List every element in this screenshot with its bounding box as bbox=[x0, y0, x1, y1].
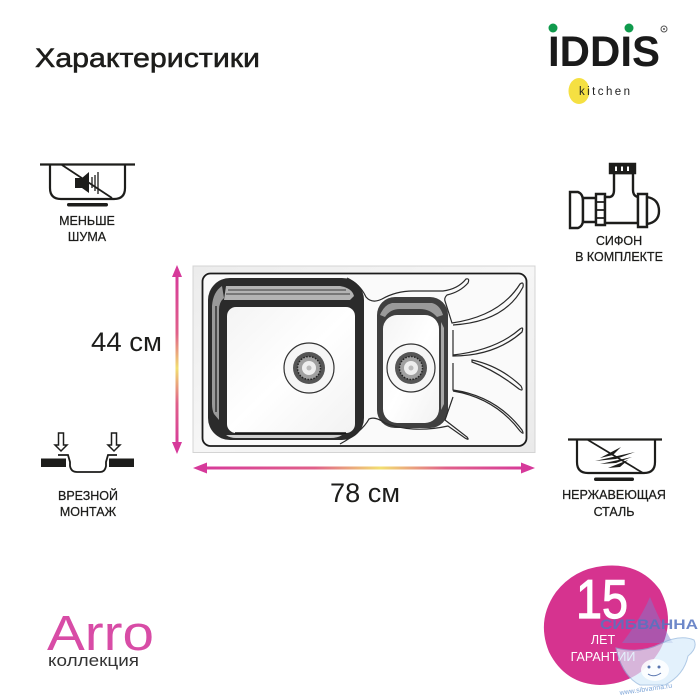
large bowl bbox=[208, 278, 364, 440]
warranty badge: ГАРАНТИИ bbox=[571, 650, 635, 664]
watermark: Sibvanna: СИБВАННА bbox=[600, 616, 698, 632]
warranty badge bbox=[544, 566, 668, 685]
arrow: height bbox=[172, 265, 182, 454]
logo: IDDIS kitchen: kitchen bbox=[579, 86, 630, 98]
sink photo bbox=[193, 266, 535, 452]
warranty badge: ЛЕТ bbox=[591, 633, 615, 647]
label: flush mounting: ВРЕЗНОЙ bbox=[58, 488, 118, 503]
logo: IDDIS kitchen: IDDIS bbox=[548, 28, 660, 76]
icon: stainless steel bbox=[568, 440, 662, 481]
label: less noise: ШУМА bbox=[68, 230, 107, 244]
label: stainless steel: СТАЛЬ bbox=[594, 505, 634, 519]
drain: large bowl bbox=[284, 343, 334, 393]
label: flush mounting: МОНТАЖ bbox=[60, 505, 117, 519]
collection name: Arro bbox=[47, 607, 154, 661]
title: Характеристики bbox=[35, 43, 260, 73]
warranty badge: 15 bbox=[576, 568, 628, 630]
label: siphon: СИФОН bbox=[596, 234, 642, 248]
rim and drainboard grooves bbox=[340, 278, 523, 444]
icon: less noise bbox=[40, 164, 135, 206]
logo: IDDIS kitchen bbox=[548, 24, 667, 104]
small bowl bbox=[377, 297, 448, 428]
label: stainless steel: НЕРЖАВЕЮЩАЯ bbox=[562, 488, 666, 502]
watermark: Sibvanna: www.sibvanna.ru bbox=[618, 683, 673, 697]
icon: flush mounting bbox=[41, 433, 134, 472]
dimension: height: 44 см bbox=[91, 327, 162, 357]
collection name: коллекция bbox=[48, 651, 139, 670]
label: less noise: МЕНЬШЕ bbox=[59, 214, 115, 228]
dimension: width: 78 см bbox=[330, 478, 400, 508]
watermark: Sibvanna bbox=[600, 597, 698, 697]
drain: small bowl bbox=[387, 344, 435, 392]
label: siphon: В КОМПЛЕКТЕ bbox=[575, 250, 663, 264]
icon: siphon bbox=[570, 164, 659, 228]
arrow: width bbox=[193, 462, 535, 474]
